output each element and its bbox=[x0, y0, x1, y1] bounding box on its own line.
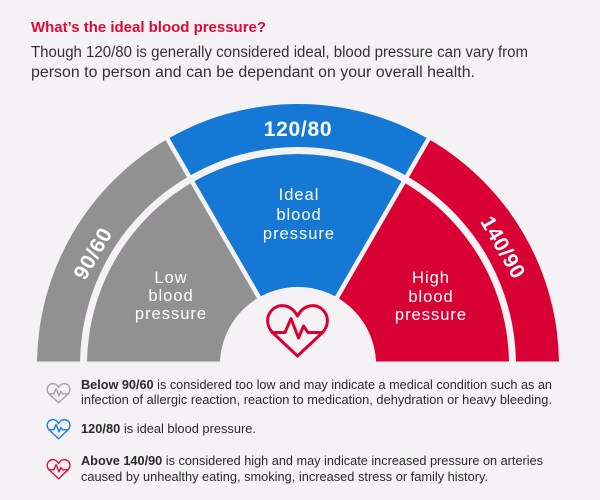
icon: central heart bbox=[268, 306, 327, 356]
inner sector: ideal bbox=[192, 154, 404, 298]
label: high blood pressure: pressure bbox=[395, 306, 467, 324]
icon: blue heart bbox=[47, 420, 70, 439]
label: ideal blood pressure: pressure bbox=[263, 225, 335, 243]
text: below 90/60: Below 90/60 is considered too low and may indicate a medical condition such as an bbox=[81, 378, 552, 392]
text: 120/80: 120/80 is ideal blood pressure. bbox=[81, 422, 256, 436]
label: low blood pressure: Low bbox=[154, 269, 188, 287]
text: above 140/90: Above 140/90 is considered high and may indicate increased pressure on arteries bbox=[81, 454, 543, 468]
label: low blood pressure: blood bbox=[148, 287, 194, 305]
label: ideal blood pressure: Ideal bbox=[279, 186, 319, 204]
inner sector: high bbox=[337, 182, 509, 365]
label: ideal blood pressure: blood bbox=[276, 206, 322, 224]
intro text: Though 120/80 is generally considered ideal, blood pressure can vary from bbox=[31, 44, 528, 61]
inner sector: low bbox=[87, 182, 259, 365]
label: low blood pressure: pressure bbox=[135, 305, 207, 323]
label: 140/90: 140/90 bbox=[476, 212, 530, 283]
title: What’s the ideal blood pressure? bbox=[31, 19, 266, 36]
legend: low: infection of allergic reaction, reaction to medication, dehydration or heavy bleeding. bbox=[81, 393, 552, 407]
outer band: high bbox=[407, 139, 559, 365]
legend: ideal bbox=[47, 420, 256, 439]
legend: high: caused by unhealthy eating, smoking, increased stress or family history. bbox=[81, 470, 488, 484]
icon: gray heart bbox=[47, 384, 70, 403]
legend: high bbox=[47, 454, 543, 484]
label: 120/80: 120/80 bbox=[264, 118, 332, 141]
icon: red heart bbox=[47, 460, 70, 479]
intro text bbox=[31, 44, 528, 81]
outer band: low bbox=[37, 139, 189, 365]
intro text: person to person and can be dependant on your overall health. bbox=[31, 64, 475, 81]
label: high blood pressure: blood bbox=[408, 288, 454, 306]
gauge chart bbox=[37, 104, 559, 362]
label: 90/60: 90/60 bbox=[69, 224, 117, 284]
outer band: ideal bbox=[168, 104, 428, 176]
label: high blood pressure: High bbox=[412, 269, 450, 287]
legend: low bbox=[47, 378, 552, 407]
